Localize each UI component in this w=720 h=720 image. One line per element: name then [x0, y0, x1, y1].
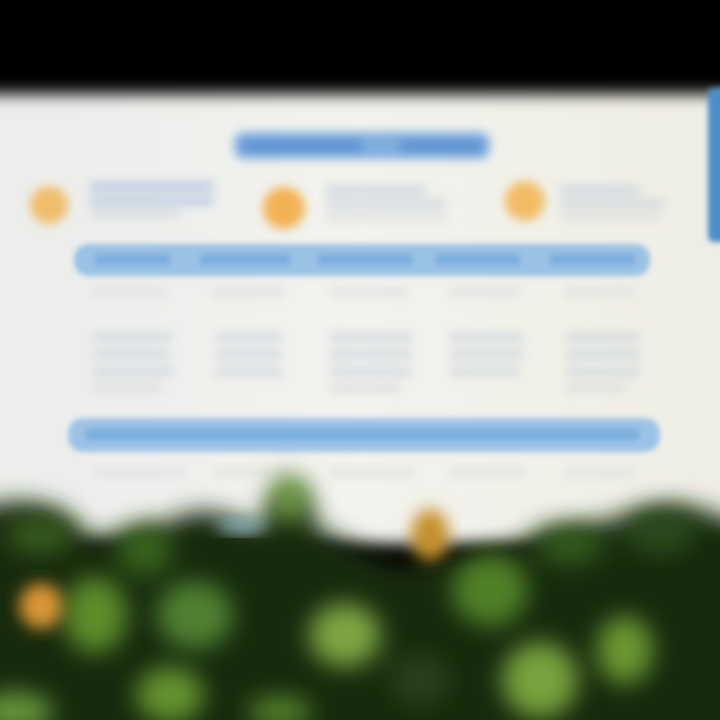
title [234, 132, 490, 159]
table cells [92, 288, 640, 392]
icon: orange fruit left [19, 583, 63, 629]
text block: middle feature [326, 186, 446, 220]
icon: orange circle right [505, 181, 545, 221]
text block: left feature [90, 182, 214, 217]
leaf highlights [0, 474, 696, 720]
icon: orange circle middle [263, 187, 305, 229]
foliage [0, 474, 720, 720]
table header band [74, 244, 650, 276]
text block: right feature [560, 186, 665, 220]
icon: orange fruit centre [411, 509, 449, 561]
second table band [68, 418, 660, 452]
foliage base [0, 491, 720, 720]
icon: orange circle left [30, 186, 68, 224]
lower text row [95, 468, 635, 477]
blue side tab [708, 88, 720, 242]
panel: white board [0, 94, 720, 544]
feature row [30, 181, 665, 229]
blue reflection [216, 517, 264, 533]
